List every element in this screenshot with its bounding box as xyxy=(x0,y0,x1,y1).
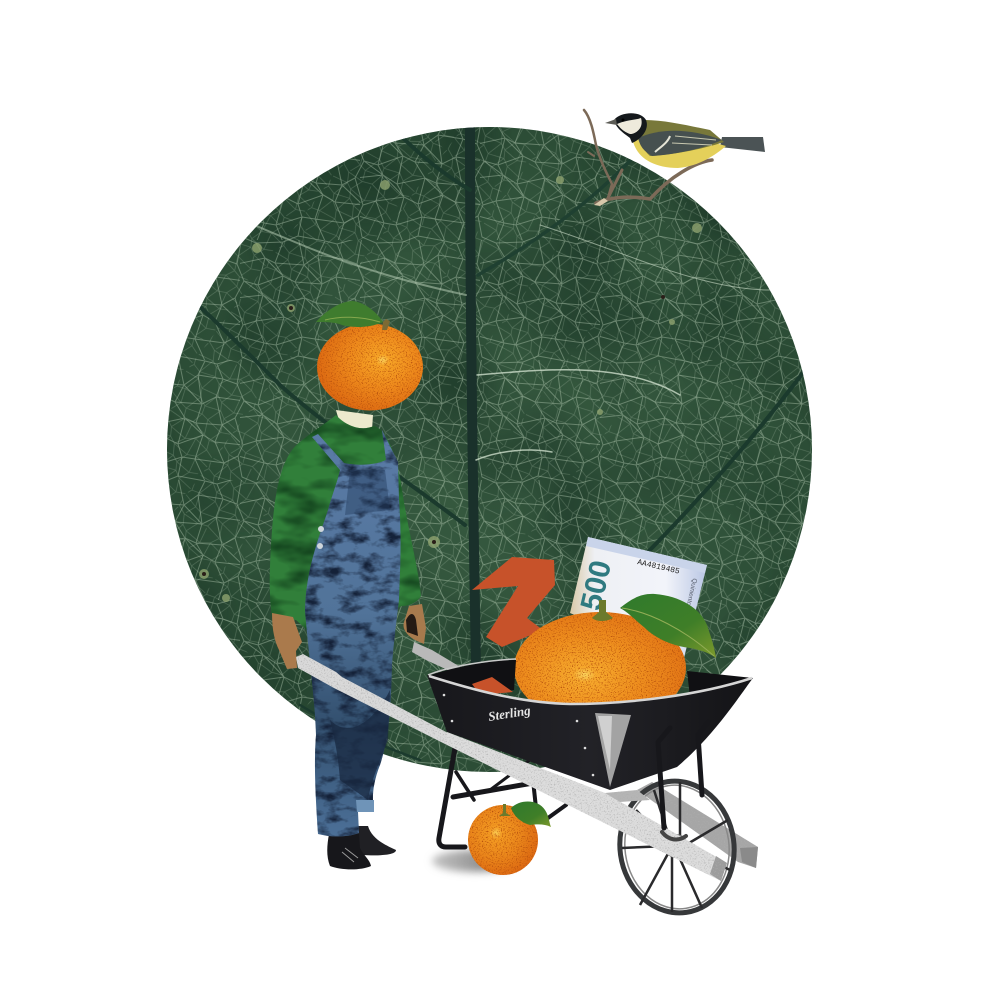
banknote top band xyxy=(586,537,707,573)
green shirt xyxy=(270,415,421,640)
collage illustration xyxy=(167,108,812,916)
big orange leaf xyxy=(620,594,716,658)
branch xyxy=(584,110,712,203)
tray back rim right xyxy=(687,671,753,697)
back and wing xyxy=(639,120,724,156)
tray back rim left xyxy=(428,660,516,694)
overalls xyxy=(305,430,401,836)
wheelbarrow legs xyxy=(439,748,566,847)
stem xyxy=(499,804,511,816)
cuff xyxy=(356,800,374,812)
big orange xyxy=(514,600,686,724)
overalls dark shading xyxy=(330,690,390,800)
leaf xyxy=(511,801,551,827)
wheelbarrow tray xyxy=(427,659,753,790)
red paper fragment xyxy=(472,677,513,695)
small orange xyxy=(468,801,551,875)
tray fold xyxy=(595,713,631,787)
back of wheel frame xyxy=(637,782,758,868)
brand name: Sterling xyxy=(487,702,532,724)
banknote serial number: AA4819485 xyxy=(636,558,681,577)
leaf dark veins xyxy=(198,128,805,760)
paper fold red shape xyxy=(472,557,555,647)
shoes xyxy=(327,826,396,869)
small orange fruit xyxy=(468,805,538,875)
man in overalls xyxy=(270,410,426,869)
wheel xyxy=(611,774,743,920)
left glove xyxy=(272,613,302,669)
tray body xyxy=(427,675,753,790)
head orange xyxy=(316,301,423,410)
banknote script: Quinientos Pesos xyxy=(679,578,698,629)
buttons xyxy=(318,526,324,532)
handle rail xyxy=(296,654,727,881)
bird on branch xyxy=(584,110,765,206)
neck and collar xyxy=(336,410,373,430)
rivets xyxy=(443,694,594,776)
belly xyxy=(632,128,726,168)
panel: green leaf disc xyxy=(160,120,820,780)
second handle xyxy=(412,642,462,672)
head fruit xyxy=(317,324,423,410)
stem xyxy=(382,319,390,330)
banknote denomination: 500 xyxy=(575,557,618,614)
wheel bracket xyxy=(658,722,708,839)
right glove xyxy=(403,604,426,644)
head leaf xyxy=(316,301,383,327)
shadow under small orange xyxy=(432,850,516,872)
tail xyxy=(720,137,765,152)
head xyxy=(614,113,647,143)
big orange fruit xyxy=(514,612,686,724)
stem xyxy=(592,600,613,621)
leaf pale spots xyxy=(199,176,702,602)
banknote 500 xyxy=(570,537,707,662)
